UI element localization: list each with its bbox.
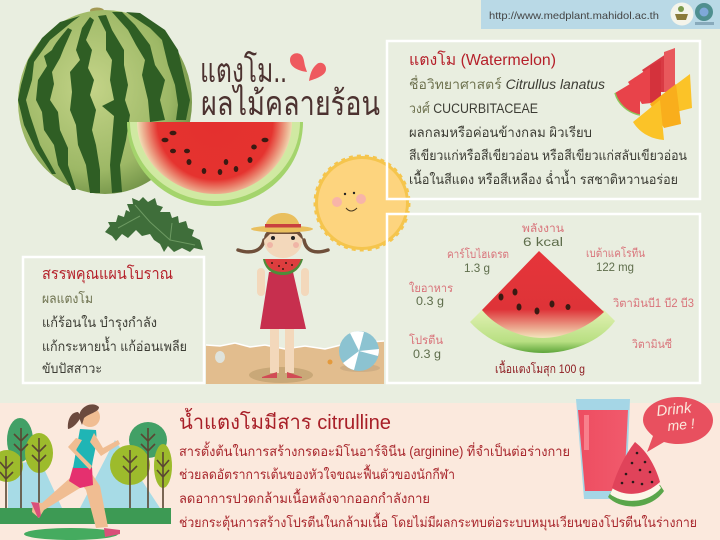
nutrient labels: ใยอาหาร	[409, 282, 453, 295]
stripes	[18, 12, 190, 193]
url bar	[481, 0, 720, 29]
hat	[251, 213, 313, 232]
icon: red heart drops	[290, 53, 326, 81]
nutrient labels: คาร์โบไฮเดรต	[447, 247, 509, 261]
nutrient labels: เบต้าแคโรทีน	[586, 246, 645, 260]
ground	[0, 508, 171, 524]
trees	[0, 418, 172, 508]
nutrient labels	[409, 223, 694, 351]
uses text: ขับปัสสาวะ	[42, 361, 102, 376]
uses text: แก้กระหายน้ำ แก้อ่อนเพลีย	[42, 336, 187, 354]
logo: medicinal plant	[670, 2, 694, 26]
nutrient values: 0.3 g	[413, 349, 441, 361]
icon: watermelon wedge	[608, 442, 664, 506]
description lines: เนื้อในสีแดง หรือสีเหลือง ฉ่ำน้ำ รสชาติหวานอร่อย	[409, 169, 678, 187]
shadow	[249, 367, 313, 383]
description lines: ชื่อวิทยาศาสตร์ Citrullus lanatus	[409, 75, 605, 92]
beach ball	[339, 331, 380, 372]
girl	[238, 213, 328, 378]
description lines	[409, 75, 687, 187]
heading: watermelon: แตงโม (Watermelon)	[409, 50, 556, 69]
uses text: ผลแตงโม	[42, 290, 93, 306]
nutrient values: 122 mg	[596, 262, 634, 274]
logo: faculty	[695, 3, 714, 25]
panel: description	[387, 41, 700, 199]
speech bubble: me !	[667, 415, 696, 434]
watermelon half slice	[127, 122, 303, 206]
nutrient values: 0.3 g	[416, 296, 444, 308]
nutrient labels: พลังงาน	[522, 223, 564, 235]
sandals	[262, 372, 302, 378]
arms	[257, 268, 309, 296]
seeds	[162, 131, 268, 175]
braids	[238, 240, 328, 252]
watermelon in hand	[263, 259, 303, 275]
head	[264, 224, 302, 258]
description lines: วงศ์ CUCURBITACEAE	[409, 100, 538, 116]
shell	[215, 351, 225, 363]
chart: watermelon wedge	[470, 251, 615, 353]
nutrient values: 1.3 g	[464, 263, 490, 275]
sky shapes	[8, 440, 160, 508]
uses text	[42, 290, 187, 376]
nutrient values	[413, 237, 634, 361]
serving caption: เนื้อแตงโมสุก 100 g	[495, 360, 585, 377]
leaf	[105, 197, 203, 252]
title: ผลไม้คลายร้อน	[201, 84, 380, 123]
whole watermelon	[18, 8, 192, 194]
dress	[260, 272, 306, 329]
icon: juice glass	[576, 399, 630, 499]
nutrient values: 6 kcal	[523, 237, 563, 249]
juice benefits text: ลดอาการปวดกล้ามเนื้อหลังจากออกกำลังกาย	[179, 488, 430, 506]
speech bubble	[643, 397, 713, 452]
legs	[270, 325, 294, 373]
nutrient labels: วิตามินบี1 บี2 บี3	[612, 297, 694, 310]
description lines: สีเขียวแก่หรือสีเขียวอ่อน หรือสีเขียวแก่สลับเขียวอ่อน	[409, 148, 687, 163]
juice benefits text: ช่วยลดอัตราการเต้นของหัวใจขณะฟื้นตัวของนักกีฬา	[179, 464, 455, 482]
sun	[315, 156, 409, 250]
juice benefits text: สารตั้งต้นในการสร้างกรดอะมิโนอาร์จินีน (arginine) ที่จำเป็นต่อร่างกาย	[179, 441, 570, 459]
title	[200, 51, 380, 123]
nutrient labels: โปรตีน	[409, 333, 443, 347]
starfish	[328, 360, 332, 364]
speech bubble: Drink	[656, 399, 694, 420]
trunks and branches	[0, 428, 169, 508]
juice benefits text	[179, 441, 697, 531]
panel: traditional uses	[23, 257, 204, 383]
heading: juice: น้ำแตงโมมีสาร citrulline	[179, 408, 391, 434]
nutrient labels: วิตามินซี	[632, 338, 672, 351]
sun face	[332, 192, 366, 211]
runner scene	[0, 404, 172, 540]
heading: traditional uses: สรรพคุณแผนโบราณ	[42, 264, 173, 284]
beach scene	[206, 331, 384, 384]
title: แตงโม..	[200, 51, 287, 90]
uses text: แก้ร้อนใน บำรุงกำลัง	[42, 314, 157, 331]
seeds	[498, 288, 570, 314]
bottom band background	[0, 403, 720, 540]
icon: red and yellow slices	[615, 48, 692, 140]
runner figure	[31, 404, 120, 537]
panel: nutrition	[387, 214, 700, 383]
description lines: ผลกลมหรือค่อนข้างกลม ผิวเรียบ	[409, 125, 592, 140]
url text: http://www.medplant.mahidol.ac.th	[489, 10, 659, 22]
